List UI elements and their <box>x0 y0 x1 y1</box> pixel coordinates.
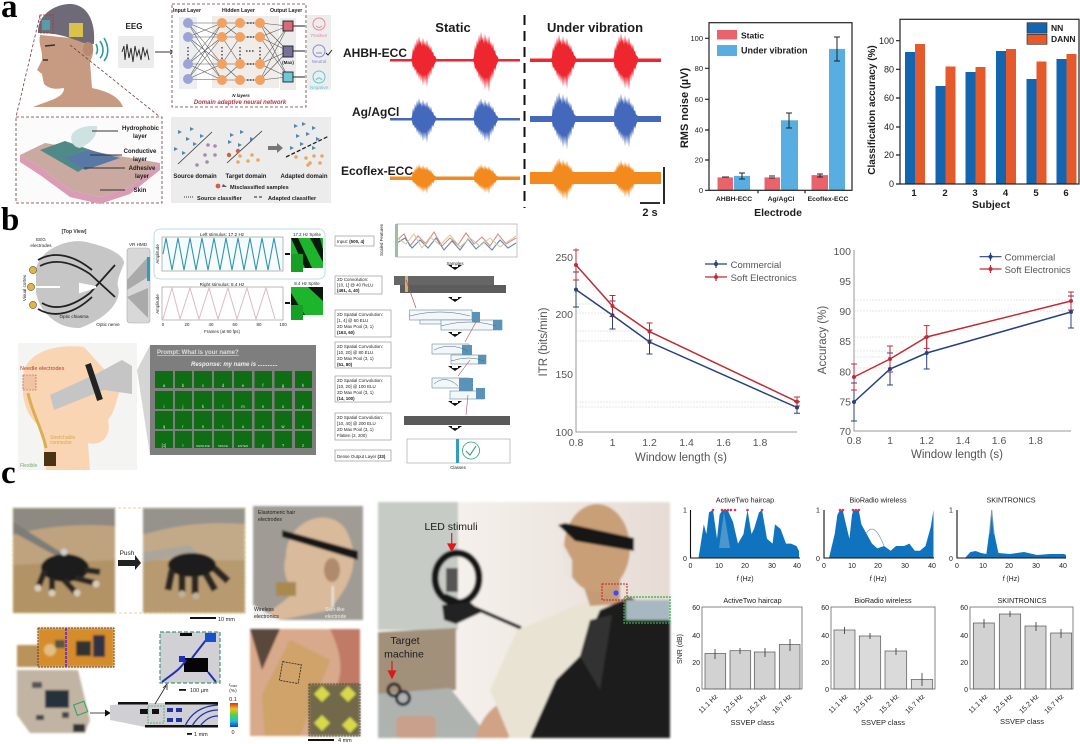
chart: ActiveTwo haircap spectrum: 1 <box>683 508 687 514</box>
label: EEG: EEG <box>126 22 142 31</box>
chart: BioRadio wireless spectrum <box>816 496 936 583</box>
chart: accuracy vs window length: 0.8 <box>847 435 861 447</box>
chart: ActiveTwo haircap spectrum: 20 <box>741 563 749 570</box>
chart: right stimulus 8.4 Hz: 80 <box>257 322 262 327</box>
diagram: convolutional network architecture: [10, 1] @ 40 ReLU <box>337 282 373 288</box>
chart: right stimulus 8.4 Hz: Frames (at 90 fps) <box>204 329 240 334</box>
chart: accuracy vs window length: 1.8 <box>1028 435 1043 447</box>
panel: speller screen: ! <box>182 443 184 448</box>
illustration: VR visual pathway brain: [Top View] <box>62 229 87 235</box>
chart: BioRadio wireless spectrum: 0 <box>816 556 820 563</box>
diagram: convolutional network architecture: Flatten (2, 200) <box>337 433 367 438</box>
trace: Ag/AgCl <box>352 92 661 150</box>
diagram: convolutional network architecture: Samples <box>446 261 464 266</box>
photo: head with headband electrodes <box>253 506 363 620</box>
diagram: domain adaptation: Adapted classifier <box>268 196 317 202</box>
illustration: VR visual pathway brain: Optic nerve <box>96 322 120 327</box>
chart: SKINTRONICS spectrum: 40 <box>1059 563 1067 570</box>
legend: strain colour bar: r <box>229 683 230 688</box>
diagram: electrode layer stack: Conductive <box>124 149 157 155</box>
chart: ActiveTwo haircap spectrum: 10 <box>715 563 723 570</box>
chart: accuracy vs window length: 90 <box>839 306 851 318</box>
chart: ActiveTwo SNR bars: 15.2 Hz <box>746 693 769 715</box>
panel: speller screen: SPACE <box>218 444 228 448</box>
chart: accuracy vs window length: Window length (s) <box>911 449 1003 461</box>
legend: strain colour bar: max <box>230 684 237 688</box>
diagram: convolutional network architecture: 2D Spatial Convolution: <box>337 378 383 383</box>
panel: b <box>1 202 1074 470</box>
diagram: convolutional network architecture: Input: (500, 4) <box>337 239 365 244</box>
panel: speller screen: z <box>302 443 304 448</box>
chart: BioRadio SNR bars: 15.2 Hz <box>878 693 901 715</box>
chart: RMS noise bars: RMS noise (µV) <box>679 68 691 148</box>
trace: Ecoflex-ECC <box>341 158 661 201</box>
diagram: convolutional network architecture: Scaled Features <box>379 223 384 256</box>
chart: ActiveTwo SNR bars: 40 <box>692 633 700 640</box>
chart: ActiveTwo SNR bars: ActiveTwo haircap <box>723 596 782 605</box>
icons: emotion classes: Negative <box>310 85 329 90</box>
photo: head with headband electrodes: Elastomeric hair <box>258 510 295 516</box>
illustration: side head with VR headset: Stretchable <box>50 435 76 441</box>
diagram: electrode layer stack: Skin <box>134 188 147 194</box>
diagram: domain adaptive neural network: Output Layer <box>270 8 302 14</box>
chart: ITR vs window length: 100 <box>555 427 573 439</box>
panel: speller screen: l <box>223 404 224 409</box>
chart: ActiveTwo SNR bars: 0 <box>696 687 700 694</box>
chart: ActiveTwo SNR bars: SNR (dB) <box>677 634 684 664</box>
chart: SKINTRONICS spectrum: SKINTRONICS <box>986 496 1036 504</box>
chart: accuracy vs window length: Soft Electronics <box>1005 265 1071 276</box>
chart: left stimulus 17.2 Hz <box>154 229 325 279</box>
diagram: domain adaptation: Adapted domain <box>280 174 328 180</box>
arrow: push <box>13 508 245 613</box>
panel: speller screen: e <box>242 383 245 388</box>
icons: emotion classes <box>307 15 332 90</box>
chart: BioRadio wireless spectrum: f (Hz) <box>869 576 887 583</box>
panel: c <box>1 455 1073 744</box>
diagram: convolutional network architecture: [10, 20] @ 100 ELU <box>337 384 376 389</box>
diagram: convolutional network architecture: 2D Max Pool (3, 1) <box>337 356 374 361</box>
chart: classification accuracy bars: 20 <box>884 150 894 160</box>
chart: ActiveTwo SNR bars: SSVEP class <box>730 718 775 727</box>
trace: Ecoflex-ECC: Ecoflex-ECC <box>341 164 413 178</box>
chart: RMS noise bars: 0 <box>699 186 703 195</box>
chart: SKINTRONICS spectrum: 10 <box>979 563 987 570</box>
chart: ActiveTwo haircap spectrum: 30 <box>768 563 776 570</box>
panel: a <box>1 0 1079 219</box>
chart: RMS noise bars: AHBH-ECC <box>716 196 752 203</box>
chart: ActiveTwo SNR bars: 12.5 Hz <box>722 693 745 715</box>
illustration: VR HMD lens panel: VR HMD <box>129 242 148 247</box>
panel: speller screen: f <box>262 383 264 388</box>
chart: ActiveTwo haircap spectrum: 0 <box>683 556 687 563</box>
chart: classification accuracy bars: NN <box>1051 23 1063 33</box>
chart: classification accuracy bars: Classification accuracy (%) <box>867 45 878 175</box>
chart: classification accuracy bars: 1 <box>911 188 917 199</box>
scale bar: 10 mm: 10 mm <box>218 617 235 623</box>
diagram: domain adaptation: Source classifier <box>197 196 243 202</box>
legend: strain colour bar: 0 <box>231 730 235 736</box>
illustration: VR HMD lens panel <box>127 242 150 323</box>
photo: head with headband electrodes: electronics <box>254 614 279 620</box>
photo: head with headband electrodes: electrode <box>325 614 346 620</box>
photo: hair electrode before push <box>13 508 115 613</box>
chart: RMS noise bars: Ag/AgCl <box>768 196 795 203</box>
illustration: VR visual pathway brain: Visual cortex <box>22 274 27 301</box>
chart: SKINTRONICS SNR bars: 40 <box>960 633 968 640</box>
chart: accuracy vs window length: 1.6 <box>992 435 1006 447</box>
chart: SKINTRONICS spectrum: 0 <box>955 563 959 570</box>
chart: BioRadio SNR bars: 12.5 Hz <box>852 693 875 715</box>
chart: BioRadio SNR bars: BioRadio wireless <box>854 596 912 605</box>
panel: speller screen: y <box>262 443 265 448</box>
panel: speller screen: o <box>282 404 285 409</box>
arrow: target machine <box>388 661 396 678</box>
chart: accuracy vs window length: 100 <box>833 246 851 258</box>
chart: BioRadio wireless spectrum: 10 <box>848 563 856 570</box>
chart: accuracy vs window length: 95 <box>839 276 851 288</box>
photo: hair electrode after push <box>143 508 245 613</box>
panel: speller screen: [1] <box>162 443 166 448</box>
chart: strain map inset <box>160 632 220 694</box>
illustration: VR visual pathway brain: Optic chiasma <box>59 314 89 319</box>
chart: left stimulus 17.2 Hz: 17.2 Hz Sprite <box>293 232 321 237</box>
chart: electrode signal traces: Static <box>435 20 471 35</box>
panel: speller screen: Response: my name is ............ <box>191 362 278 368</box>
photo: PCB close-up <box>17 628 114 667</box>
panel: speller screen: c <box>202 383 204 388</box>
icons: emotion classes: Positive <box>311 33 327 38</box>
scale bar: 10 mm <box>190 617 235 623</box>
chart: SKINTRONICS SNR bars: 16.7 Hz <box>1043 693 1066 715</box>
arrow: circuit to FEA <box>90 710 110 716</box>
illustration: VR visual pathway brain: electrodes <box>30 243 52 248</box>
diagram: convolutional network architecture: 2D Spatial Convolution: <box>337 344 383 349</box>
diagram: domain adaptive neural network: Domain adaptive neural network <box>194 100 287 106</box>
illustration: VR visual pathway brain <box>22 229 124 328</box>
chart: BioRadio SNR bars: SSVEP class <box>861 718 905 727</box>
diagram: domain adaptive neural network <box>172 4 306 107</box>
chart: ITR vs window length: Soft Electronics <box>731 273 797 284</box>
chart: SKINTRONICS spectrum: 20 <box>1005 563 1013 570</box>
chart: RMS noise bars: 20 <box>695 156 703 165</box>
panel: speller screen: Prompt: What is your name? <box>157 350 239 356</box>
chart: ActiveTwo SNR bars: 16.7 Hz <box>771 693 794 715</box>
chart: BioRadio SNR bars: 20 <box>821 660 829 667</box>
chart: accuracy vs window length: 1.2 <box>919 435 934 447</box>
illustration: head wearing EEG patch <box>33 4 123 107</box>
panel: speller screen: d <box>222 383 225 388</box>
chart: electrode signal traces: 2 s <box>642 207 658 219</box>
chart: strain map strip: 1 mm <box>194 732 208 738</box>
chart: right stimulus 8.4 Hz: 40 <box>209 322 214 327</box>
illustration: side head with VR headset: connector <box>50 440 72 446</box>
chart: right stimulus 8.4 Hz: Amplitude <box>155 294 160 314</box>
chart: BioRadio SNR bars: 60 <box>821 605 829 612</box>
arrow: LED stimuli <box>448 533 456 551</box>
chart: SKINTRONICS SNR bars: 12.5 Hz <box>992 693 1015 715</box>
chart: ITR vs window length: 1 <box>610 437 616 449</box>
chart: SKINTRONICS SNR bars: SSVEP class <box>1000 717 1044 726</box>
chart: SKINTRONICS spectrum: 1 <box>949 508 953 514</box>
chart: ITR vs window length <box>538 248 800 464</box>
chart: RMS noise bars: Ecoflex-ECC <box>808 196 848 203</box>
chart: SKINTRONICS spectrum <box>949 496 1067 583</box>
photo: flexible circuit <box>17 670 90 733</box>
chart: accuracy vs window length: Commercial <box>1005 252 1055 264</box>
panel: speller screen: b <box>182 383 185 388</box>
diagram: convolutional network architecture: 2D Spatial Convolution: <box>337 312 383 317</box>
chart: classification accuracy bars: 3 <box>972 188 978 199</box>
chart: ITR vs window length: 200 <box>555 309 573 321</box>
panel: speller screen: ? <box>282 443 285 448</box>
chart: classification accuracy bars: 4 <box>1003 188 1009 199</box>
chart: right stimulus 8.4 Hz: 0 <box>162 322 165 327</box>
chart: RMS noise bars: Electrode <box>754 207 802 219</box>
trace: AHBH-ECC <box>343 31 661 92</box>
chart: BioRadio wireless spectrum: 1 <box>816 508 820 514</box>
chart: accuracy vs window length: 1.4 <box>956 435 970 447</box>
chart: BioRadio wireless spectrum: 30 <box>901 563 909 570</box>
chart: SKINTRONICS SNR bars: 11.1 Hz <box>968 693 990 715</box>
panel: speller screen: s <box>202 424 204 429</box>
chart: RMS noise bars: 80 <box>695 64 703 73</box>
panel: speller screen: a <box>163 383 166 388</box>
diagram: convolutional network architecture: (491, 4, 40) <box>337 288 360 293</box>
panel: speller screen: p <box>302 404 305 409</box>
chart: ActiveTwo haircap spectrum: 0 <box>689 563 693 570</box>
chart: BioRadio wireless spectrum: 0 <box>822 563 826 570</box>
chart: accuracy vs window length: Accuracy (%) <box>817 306 829 374</box>
heading: panel letter c: c <box>1 455 16 491</box>
chart: ITR vs window length: 150 <box>555 369 573 381</box>
photo: skin-mounted electrode array <box>250 629 360 736</box>
chart: classification accuracy bars: 80 <box>884 64 894 74</box>
chart: ITR vs window length: 1.8 <box>753 437 767 449</box>
chart: BioRadio SNR bars <box>821 596 935 727</box>
diagram: convolutional network architecture: (163, 60) <box>337 330 355 335</box>
photo: head with headband electrodes: electrodes <box>258 517 282 523</box>
chart: BioRadio wireless spectrum: 20 <box>874 563 882 570</box>
arrow: strip to inset <box>155 684 167 704</box>
chart: ActiveTwo haircap spectrum: f (Hz) <box>736 576 754 583</box>
legend: strain colour bar: 0.1 <box>229 697 237 703</box>
diagram: electrode layer stack: Adhesive <box>129 166 156 172</box>
diagram: convolutional network architecture: 2D Max Pool (3, 1) <box>337 324 374 329</box>
arrow: push: Push <box>120 550 135 557</box>
chart: ActiveTwo haircap spectrum: 40 <box>793 563 801 570</box>
panel: speller screen: j <box>182 404 184 409</box>
chart: ActiveTwo haircap spectrum: ActiveTwo haircap <box>716 496 774 504</box>
chart: SKINTRONICS SNR bars <box>960 596 1073 726</box>
chart: ITR vs window length: ITR (bits/min) <box>538 307 550 376</box>
chart: RMS noise bars: 40 <box>695 126 703 135</box>
label: Target machine: Target <box>390 635 420 647</box>
diagram: convolutional network architecture: (14, 100) <box>337 396 355 401</box>
chart: SKINTRONICS SNR bars: 20 <box>960 660 968 667</box>
chart: SKINTRONICS SNR bars: 0 <box>964 687 968 694</box>
photo: subject with LED stimuli and target machine <box>378 502 670 738</box>
diagram: domain adaptive neural network: (Max) <box>282 60 294 65</box>
panel: speller screen: m <box>241 404 245 409</box>
trace: Ag/AgCl: Ag/AgCl <box>352 105 399 119</box>
chart: RMS noise bars: 100 <box>690 34 703 43</box>
chart: right stimulus 8.4 Hz: 100 <box>279 322 287 327</box>
legend: strain colour bar: (%) <box>229 688 237 694</box>
chart: ITR vs window length: 1.6 <box>716 437 731 449</box>
panel: speller screen: NEWLINE <box>196 444 210 448</box>
chart: electrode signal traces <box>341 15 664 219</box>
diagram: domain adaptive neural network: Input Layer <box>173 8 201 14</box>
diagram: electrode layer stack: layer <box>133 134 148 140</box>
diagram: electrode layer stack: layer <box>135 174 150 180</box>
chart: ActiveTwo SNR bars: 20 <box>692 660 700 667</box>
chart: classification accuracy bars: 2 <box>942 188 948 199</box>
chart: BioRadio wireless spectrum: 40 <box>928 563 936 570</box>
diagram: convolutional network architecture: [10, 40] @ 200 ELU <box>337 421 376 426</box>
chart: SKINTRONICS SNR bars: SKINTRONICS <box>997 596 1047 605</box>
diagram: domain adaptive neural network: N layers <box>232 93 250 98</box>
photo: head with headband electrodes: Skin-like <box>325 607 345 613</box>
diagram: domain adaptation: Source domain <box>173 174 217 180</box>
chart: ITR vs window length: Window length (s) <box>635 452 727 464</box>
diagram: convolutional network architecture <box>335 223 517 470</box>
panel: speller screen: n <box>262 404 265 409</box>
chart: strain map inset: 100 µm <box>190 688 209 694</box>
chart: electrode signal traces: Under vibration <box>547 20 643 35</box>
panel: speller screen: u <box>242 424 245 429</box>
panel: speller screen: ENTER <box>238 444 249 448</box>
chart: right stimulus 8.4 Hz: 60 <box>233 322 238 327</box>
chart: accuracy vs window length: 70 <box>839 426 851 438</box>
icons: emotion classes: Neutral <box>312 59 326 64</box>
illustration: VR visual pathway brain: EEG <box>36 237 46 242</box>
trace: AHBH-ECC: AHBH-ECC <box>343 46 407 60</box>
panel: speller screen: t <box>222 424 224 429</box>
panel: speller screen: x <box>302 424 305 429</box>
diagram: domain adaptive neural network: Hidden Layer <box>222 8 255 14</box>
panel: speller screen: g <box>282 383 285 388</box>
diagram: electrode layer stack: layer <box>133 157 148 163</box>
illustration: side head with VR headset: Needle electrodes <box>20 366 65 372</box>
chart: SKINTRONICS SNR bars: 60 <box>960 605 968 612</box>
chart: ActiveTwo SNR bars <box>677 596 802 727</box>
heading: panel letter b: b <box>1 202 19 238</box>
chart: RMS noise bars: 60 <box>695 95 703 104</box>
chart: classification accuracy bars: Subject <box>972 199 1010 211</box>
chart: SKINTRONICS spectrum: f (Hz) <box>1002 576 1020 583</box>
diagram: electrode layer stack <box>16 117 162 204</box>
chart: ITR vs window length: 0.8 <box>569 437 583 449</box>
chart: ITR vs window length: Commercial <box>731 260 781 271</box>
chart: left stimulus 17.2 Hz: Left stimulus: 17.2 Hz <box>200 232 245 237</box>
chart: strain map strip <box>110 702 218 738</box>
chart: ActiveTwo SNR bars: 60 <box>692 605 700 612</box>
label: Target machine: machine <box>384 648 424 660</box>
panel: speller screen: k <box>202 404 205 409</box>
panel: speller screen: r <box>182 424 184 429</box>
photo: head with headband electrodes: Wireless <box>254 607 274 613</box>
diagram: domain adaptation <box>171 117 331 203</box>
panel: speller screen: h <box>302 383 305 388</box>
chart: accuracy vs window length <box>817 246 1074 461</box>
panel: speller screen <box>137 345 316 455</box>
panel: speller screen: i <box>164 404 165 409</box>
chart: BioRadio SNR bars: 16.7 Hz <box>904 693 927 715</box>
chart: right stimulus 8.4 Hz: Right stimulus: 8.4 Hz <box>200 282 245 287</box>
chart: right stimulus 8.4 Hz <box>155 281 323 334</box>
chart: classification accuracy bars: 6 <box>1063 188 1069 199</box>
chart: accuracy vs window length: 75 <box>839 396 851 408</box>
chart: classification accuracy bars: DANN <box>1051 34 1076 44</box>
panel: speller screen: q <box>163 424 166 429</box>
chart: classification accuracy bars <box>867 19 1079 211</box>
chart: BioRadio wireless spectrum: BioRadio wireless <box>849 496 907 504</box>
diagram: convolutional network architecture: Dense Output Layer (33) <box>337 454 386 459</box>
chart: accuracy vs window length: 1 <box>887 435 893 447</box>
arrow: EEG to network <box>155 50 175 54</box>
legend: strain colour bar <box>229 682 238 736</box>
chart: classification accuracy bars: 5 <box>1033 188 1039 199</box>
chart: classification accuracy bars: 100 <box>879 36 894 46</box>
chart: left stimulus 17.2 Hz: Amplitude <box>155 244 160 264</box>
panel: speller screen: v <box>262 424 265 429</box>
diagram: convolutional network architecture: 2D Spatial Convolution: <box>337 415 383 420</box>
chart: ActiveTwo haircap spectrum <box>683 496 801 583</box>
diagram: convolutional network architecture: [10, 20] @ 80 ELU <box>337 350 373 355</box>
chart: classification accuracy bars: 60 <box>884 93 894 103</box>
icon: EEG waveform <box>118 36 154 68</box>
diagram: convolutional network architecture: (51, 80) <box>337 362 353 367</box>
diagram: domain adaptation: Misclassified samples <box>230 185 289 191</box>
chart: ActiveTwo SNR bars: 11.1 Hz <box>698 693 720 715</box>
chart: right stimulus 8.4 Hz: 20 <box>185 322 190 327</box>
diagram: electrode layer stack: Hydrophobic <box>122 126 160 132</box>
chart: BioRadio SNR bars: 11.1 Hz <box>828 693 850 715</box>
chart: accuracy vs window length: 80 <box>839 366 851 378</box>
chart: SKINTRONICS SNR bars: 15.2 Hz <box>1018 693 1041 715</box>
scale bar: 4 mm <box>308 738 352 744</box>
chart: RMS noise bars: Under vibration <box>741 46 808 56</box>
illustration: side head with VR headset <box>18 343 137 470</box>
scale bar: 4 mm: 4 mm <box>338 738 352 744</box>
chart: ITR vs window length: 1.4 <box>679 437 694 449</box>
chart: classification accuracy bars: 40 <box>884 122 894 132</box>
chart: SKINTRONICS spectrum: 30 <box>1032 563 1040 570</box>
label: LED stimuli: LED stimuli <box>424 521 478 533</box>
diagram: convolutional network architecture: 2D Convolution: <box>337 277 368 282</box>
diagram: convolutional network architecture: 2D Max Pool (3, 1) <box>337 390 374 395</box>
chart: ITR vs window length: 250 <box>555 252 573 264</box>
chart: RMS noise bars: Static <box>741 30 764 40</box>
chart: SKINTRONICS spectrum: 0 <box>949 556 953 563</box>
diagram: convolutional network architecture: 2D Max Pool (3, 1) <box>337 427 374 432</box>
panel: speller screen: w <box>281 424 285 429</box>
chart: classification accuracy bars: 0 <box>889 179 894 189</box>
diagram: convolutional network architecture: [1, 4] @ 60 ELU <box>337 318 368 323</box>
chart: BioRadio SNR bars: 0 <box>825 687 829 694</box>
chart: right stimulus 8.4 Hz: 8.4 Hz Sprite <box>294 281 320 286</box>
chart: ITR vs window length: 1.2 <box>642 437 657 449</box>
illustration: side head with VR headset: Flexible <box>20 463 37 469</box>
chart: BioRadio SNR bars: 40 <box>821 633 829 640</box>
diagram: convolutional network architecture: Classes <box>450 465 467 470</box>
chart: RMS noise bars <box>679 23 852 219</box>
chart: accuracy vs window length: 85 <box>839 336 851 348</box>
diagram: domain adaptation: Target domain <box>226 174 267 180</box>
